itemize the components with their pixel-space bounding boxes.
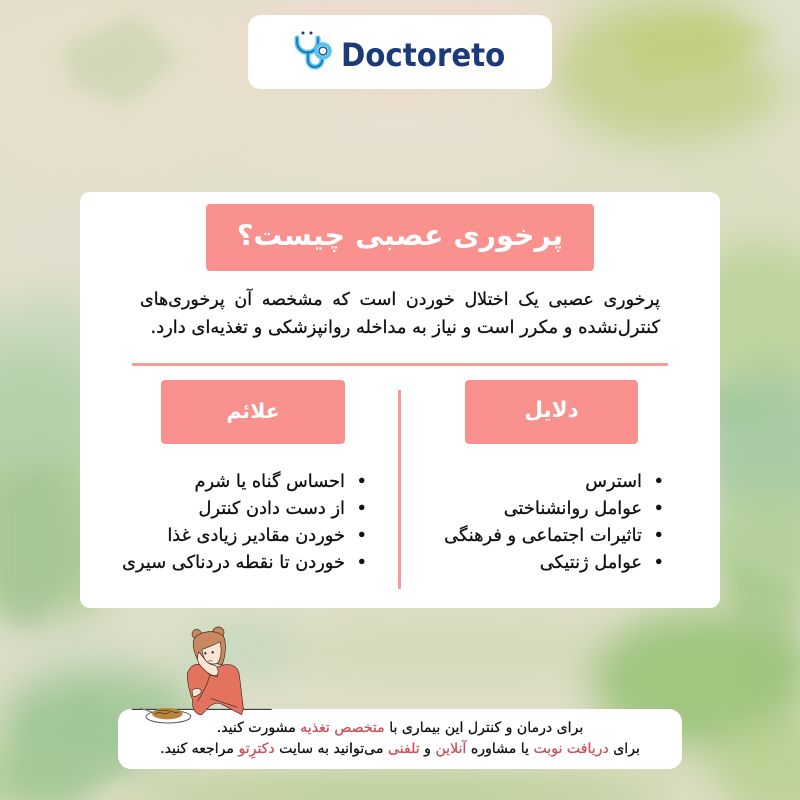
- face: [202, 642, 221, 664]
- symptoms heading: علائم: [226, 399, 280, 423]
- symptoms list: خوردن مقادیر زیادی غذا: [167, 525, 345, 546]
- divider: [132, 363, 668, 366]
- hand on cheek: [198, 652, 218, 676]
- table line: [132, 708, 272, 711]
- call to action line 2: برای دریافت نوبت یا مشاوره آنلاین و تلفنی می‌توانید به سایت دکترِتو مراجعه کنید.: [160, 741, 640, 757]
- main panel: [80, 192, 720, 608]
- causes list: [444, 471, 664, 573]
- logo card: [248, 15, 552, 89]
- main panel: •: [654, 552, 664, 573]
- vertical divider: [398, 390, 401, 589]
- heading: پرخوری عصبی چیست؟: [237, 218, 563, 252]
- main panel: •: [356, 471, 367, 492]
- main panel: •: [356, 552, 367, 573]
- sweater: [187, 664, 243, 715]
- symptoms list: خوردن تا نقطه دردناکی سیری: [122, 552, 345, 573]
- main panel: •: [356, 525, 367, 546]
- causes list: عوامل ژنتیکی: [540, 552, 642, 573]
- main panel: •: [654, 471, 664, 492]
- causes list: عوامل روانشناختی: [504, 498, 642, 519]
- sleeve folds: [197, 675, 237, 707]
- illustration: woman at table: [132, 626, 272, 724]
- eyes and mouth: [204, 651, 214, 661]
- causes heading: [465, 380, 638, 444]
- call to action line 1: برای درمان و کنترل این بیماری با متخصص تغذیه مشورت کنید.: [217, 720, 583, 736]
- causes heading: دلایل: [524, 398, 579, 423]
- symptoms list: احساس گناه یا شرم: [194, 471, 345, 492]
- intro text: پرخوری عصبی یک اختلال خوردن است که مشخصه آن پرخوری‌های: [140, 290, 660, 310]
- intro text: [140, 288, 660, 338]
- hair: [192, 627, 225, 665]
- intro text: کنترل‌نشده و مکرر است و نیاز به مداخله روانپزشکی و تغذیه‌ای دارد.: [151, 317, 660, 338]
- main panel: •: [654, 498, 664, 519]
- plate of pasta: [140, 708, 191, 723]
- main panel: •: [356, 498, 367, 519]
- symptoms heading: [161, 380, 345, 444]
- icon: stethoscope logo: [294, 32, 332, 70]
- folded hand: [192, 688, 201, 696]
- call to action card: [118, 709, 682, 769]
- main panel: •: [654, 525, 664, 546]
- causes list: تاثیرات اجتماعی و فرهنگی: [444, 525, 642, 546]
- heading: [206, 204, 594, 271]
- logo wordmark: Doctoreto: [341, 36, 505, 74]
- symptoms list: [122, 470, 367, 573]
- causes list: استرس: [585, 471, 642, 492]
- symptoms list: از دست دادن کنترل: [198, 498, 345, 519]
